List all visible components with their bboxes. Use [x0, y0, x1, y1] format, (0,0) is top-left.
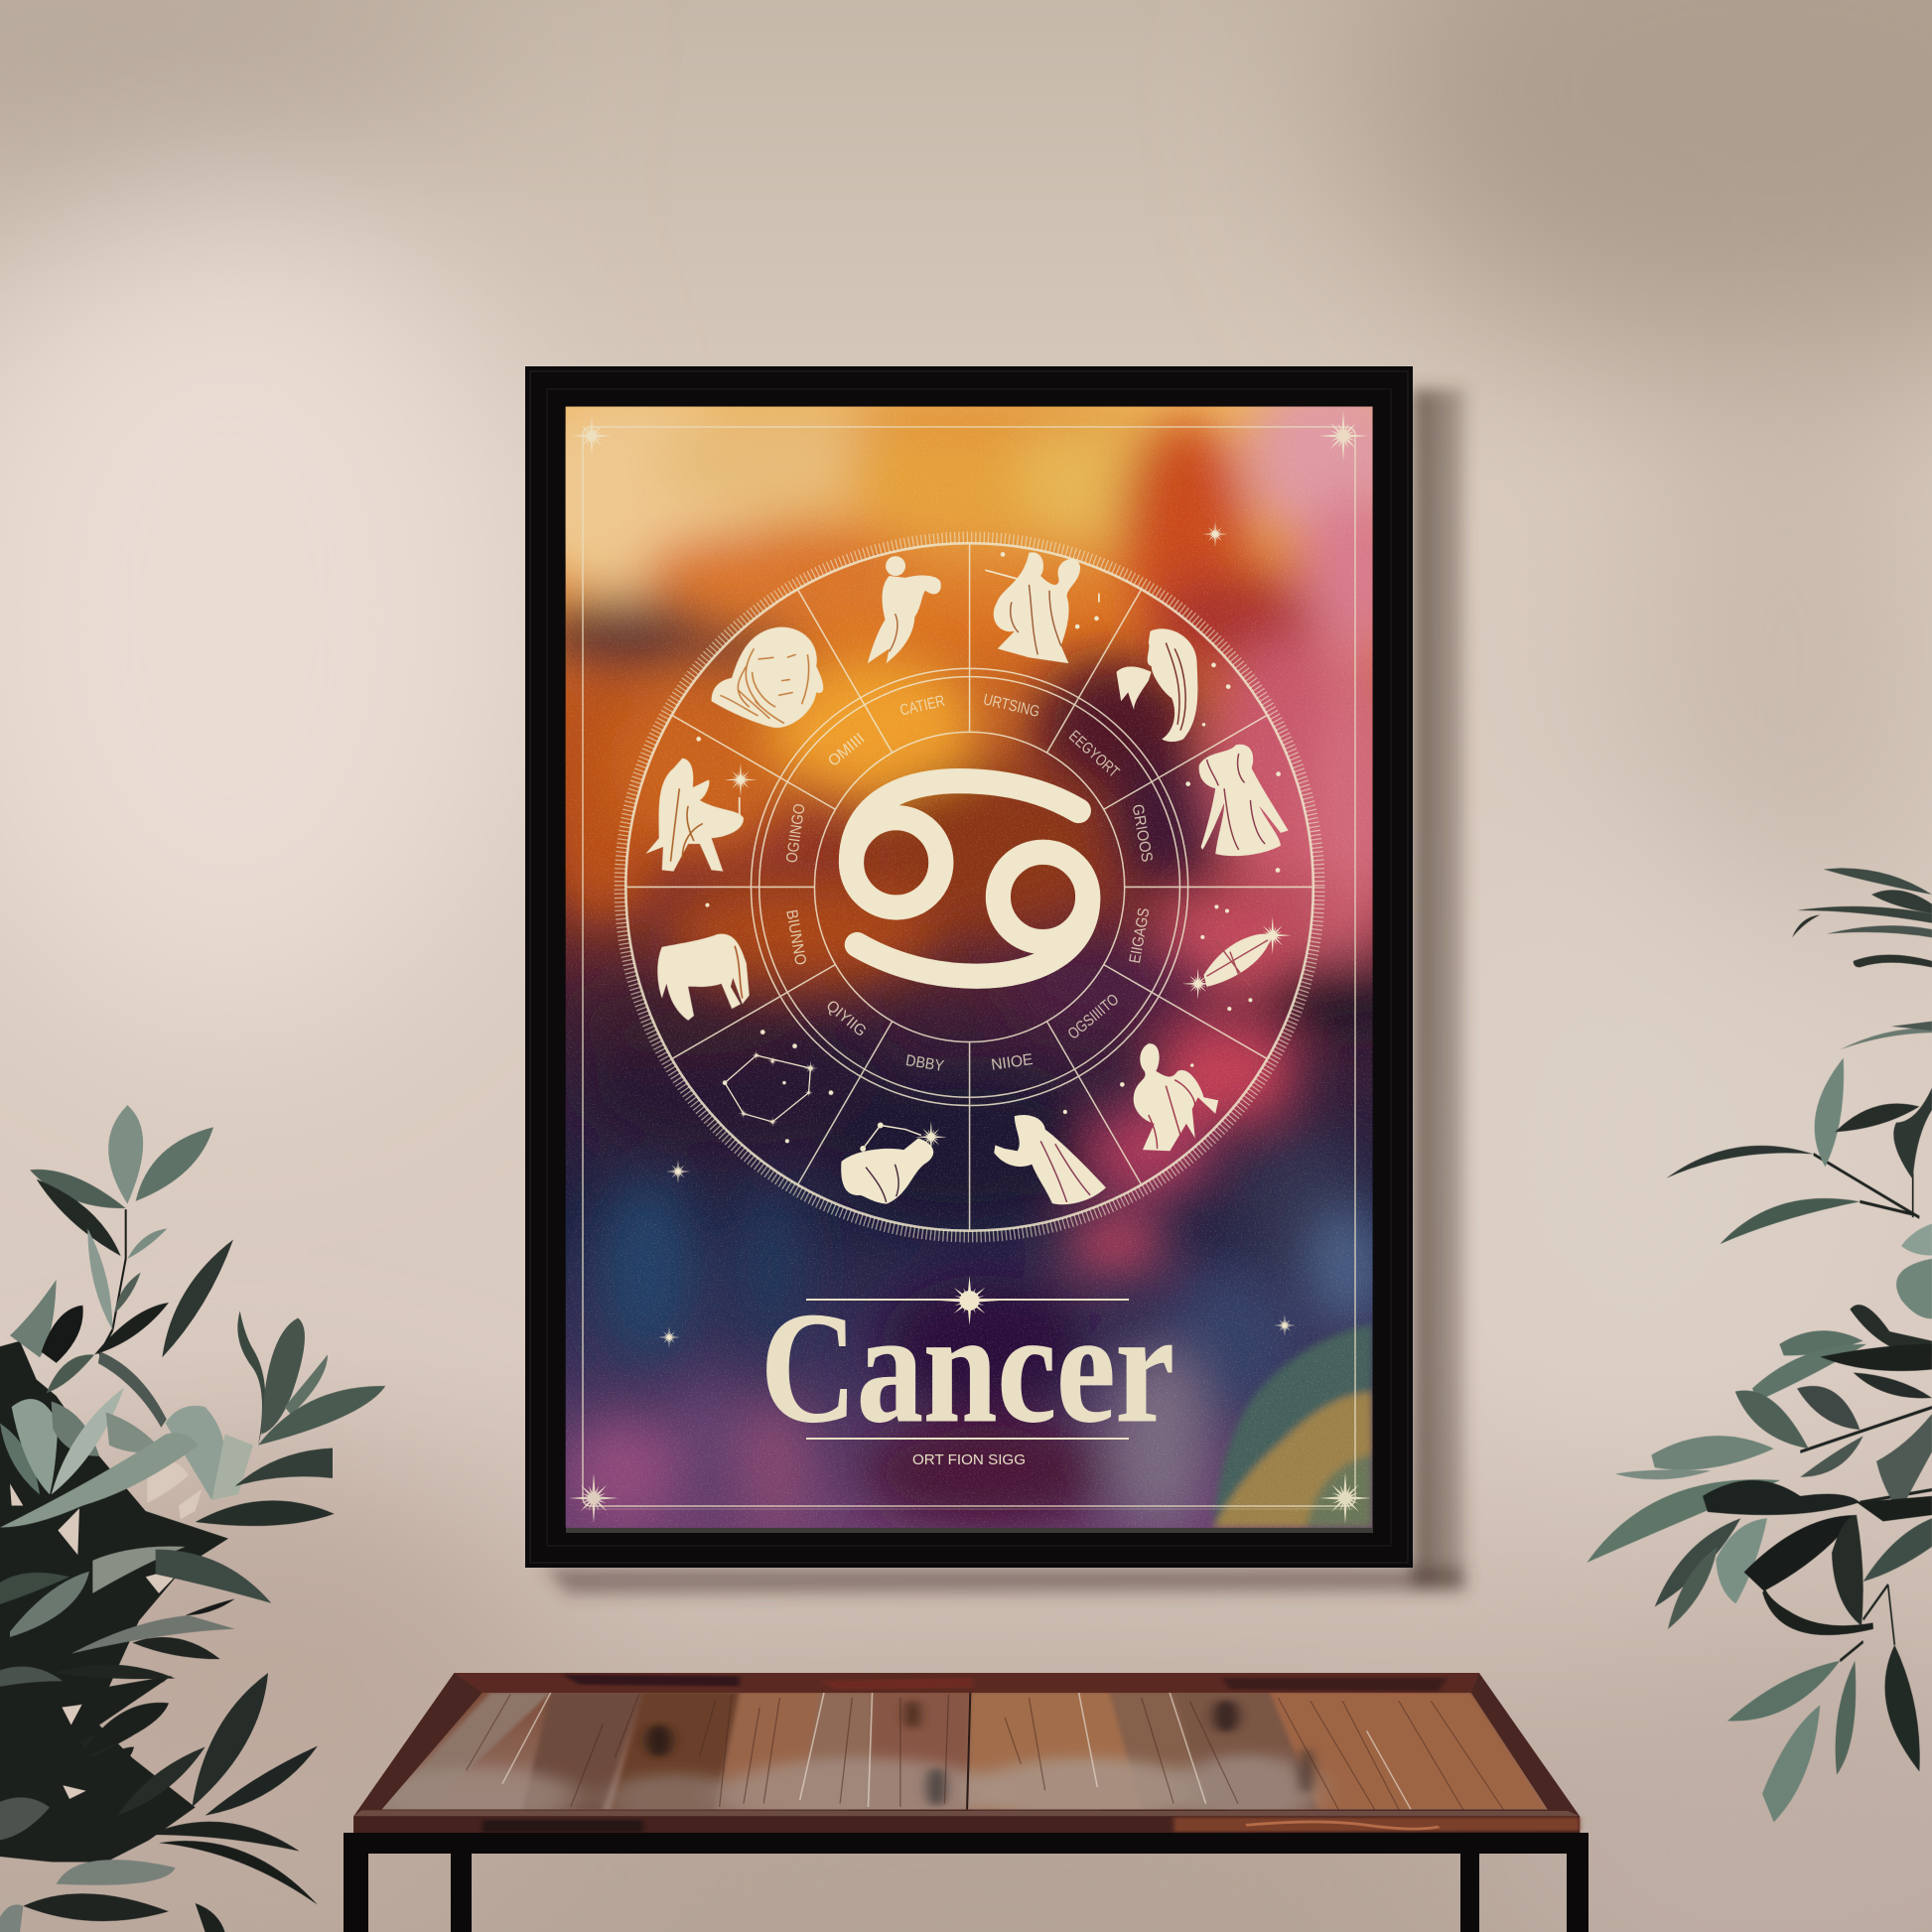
figure: twins [1185, 745, 1289, 873]
dark foliage mass [0, 1341, 228, 1863]
leaves: middle sprig [1666, 1058, 1932, 1318]
wood planks [381, 1693, 1547, 1810]
stems [1800, 1155, 1932, 1661]
corner and accent stars [569, 411, 1371, 1524]
figure: constellation [723, 1030, 833, 1143]
right plant [1587, 868, 1932, 1822]
picture frame [525, 366, 1413, 1568]
figure: caped kneeling figure [994, 1110, 1106, 1204]
ring labels: NIIOE [990, 1051, 1034, 1074]
ring labels: DBBY [904, 1052, 945, 1075]
figure: woman's face [712, 627, 823, 728]
zodiac wheel [620, 537, 1319, 1237]
ring labels: OGIINGO [783, 803, 809, 864]
ring labels: URTSING [982, 691, 1041, 721]
table [338, 1673, 1598, 1932]
decorative border [583, 427, 1355, 1509]
table legs and apron [344, 1833, 1588, 1932]
left plant [0, 1105, 385, 1932]
ring labels: EIIGAGS [1127, 906, 1153, 965]
wall gaps inside foliage [10, 1460, 202, 1799]
figure: horse [657, 903, 750, 1021]
leaves: right cluster [0, 1280, 385, 1528]
cancer glyph [851, 781, 1088, 976]
ring labels: QIYIIG [823, 998, 870, 1040]
leaves: middle bands [0, 1547, 271, 1710]
figure: seated woman with star [645, 737, 757, 872]
tagline: ORT FION SIGG [912, 1451, 1026, 1468]
figure: embracing couple [985, 552, 1099, 663]
leaves: bottom sprig [1727, 1645, 1920, 1822]
figure: reclining figure with star [841, 1121, 947, 1204]
ring labels: GRIOOS [1129, 803, 1155, 864]
title: Cancer [760, 1279, 1174, 1455]
ring labels [782, 691, 1155, 1075]
poster artwork [505, 369, 1417, 1534]
ring labels: EEGYORT [1065, 728, 1122, 781]
figure: standing nude [868, 556, 941, 663]
figure: lens constellation [1182, 904, 1292, 1011]
leaves: lower cluster [1587, 1305, 1932, 1632]
leaves: top sprig [1792, 868, 1932, 1049]
wheel rings and spokes [625, 543, 1313, 1231]
figure: seated man [1120, 1043, 1218, 1151]
title ornament: top rule and star [806, 1276, 1129, 1325]
watercolor background [566, 407, 1373, 1528]
title bottom rule [806, 1438, 1129, 1440]
tick ring [620, 537, 1319, 1237]
ring labels: CATIER [898, 693, 946, 720]
figure: long haired woman [1116, 628, 1230, 742]
ring labels: OGSIIIITO [1065, 991, 1122, 1043]
ring labels: OMIIII [825, 731, 868, 770]
table front edge [353, 1673, 1580, 1833]
frame shadow [544, 389, 1464, 1593]
table top [338, 1673, 1598, 1833]
upper branch stems [99, 1209, 126, 1355]
leaves: upper sprig [30, 1105, 233, 1357]
ring labels: BIUNNO [782, 908, 809, 967]
zodiac figures [645, 552, 1292, 1204]
leaves: lower sprays [0, 1673, 318, 1932]
